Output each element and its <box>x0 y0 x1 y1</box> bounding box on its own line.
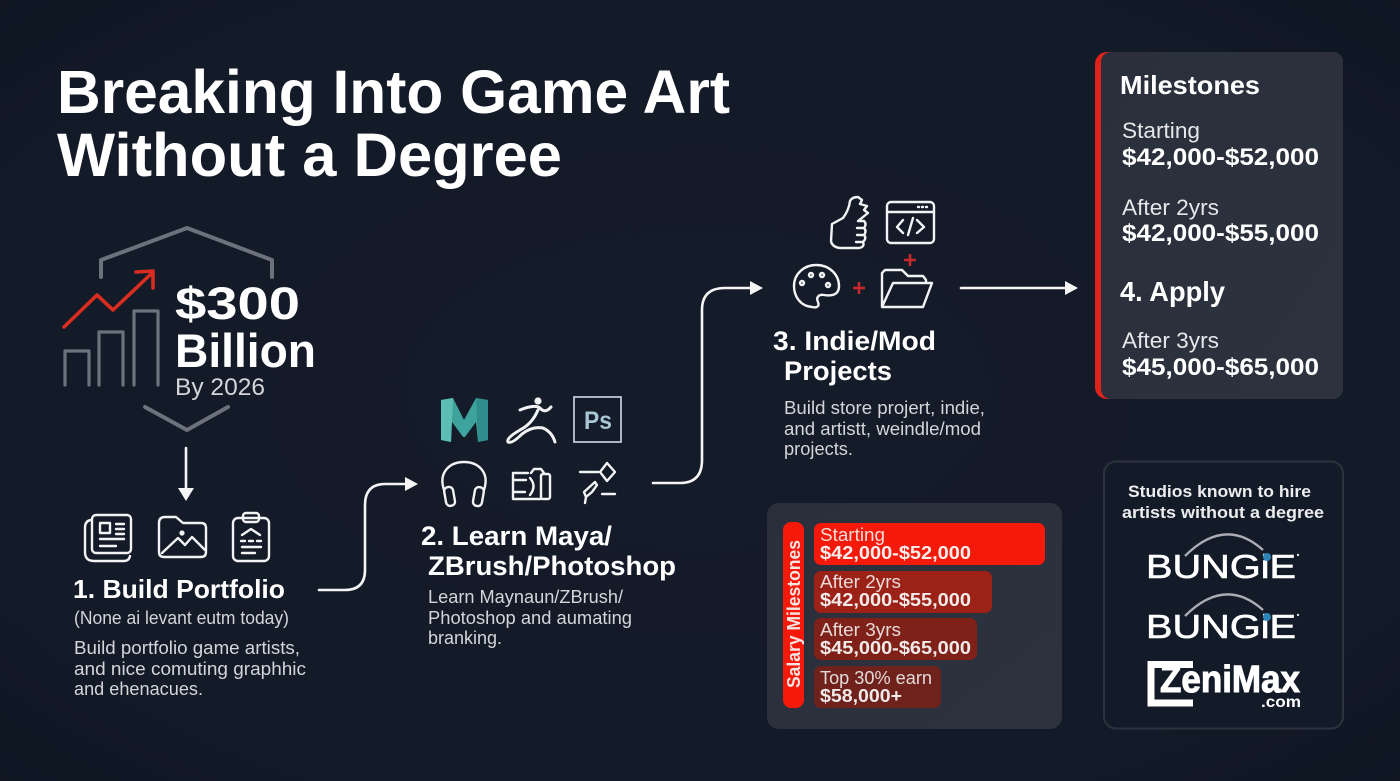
bar: top 30 percent: Top 30% earn <box>820 668 932 688</box>
milestone: after 2 years: $42,000-$55,000 <box>1122 220 1319 247</box>
panel background <box>767 503 1062 729</box>
logo: Bungie second: BUNGiE <box>1146 608 1296 645</box>
panel: studios <box>1104 462 1343 728</box>
bar: after 3 years: After 3yrs <box>820 620 901 640</box>
logo: Bungie <box>1146 534 1299 585</box>
milestone: after 2 years <box>1122 195 1319 247</box>
milestone: after 3 years <box>1122 328 1319 381</box>
icon: open folder <box>882 270 932 307</box>
logo: Bungie: BUNGiE <box>1146 548 1296 585</box>
logo: Bungie second <box>1146 594 1299 645</box>
bar: after 2 years: After 2yrs <box>820 572 901 592</box>
icon: growth bars <box>65 311 158 385</box>
arrow: step 1 to step 2 <box>319 477 418 590</box>
panel heading <box>1122 482 1324 522</box>
icon: red trend arrow <box>64 271 153 327</box>
icon: ZBrush runner <box>508 397 555 442</box>
bar: after 2 years: $42,000-$55,000 <box>820 590 971 610</box>
bar: after 3 years: $45,000-$65,000 <box>820 638 971 658</box>
bar: top 30 percent <box>814 666 941 708</box>
bar: top 30 percent: $58,000+ <box>820 686 902 706</box>
description: branking. <box>428 628 502 648</box>
milestone: starting <box>1122 118 1319 171</box>
description: Build store projert, indie, <box>784 398 985 418</box>
description: Photoshop and aumating <box>428 608 632 628</box>
heading: apply: 4. Apply <box>1120 276 1225 307</box>
bar: after 2 years <box>814 571 992 613</box>
logo: ZeniMax: .com <box>1261 694 1301 711</box>
market size stat <box>64 228 316 430</box>
description <box>428 587 632 648</box>
stat date: By 2026 <box>175 374 265 401</box>
icon: image folder <box>159 517 206 557</box>
arrow: stat to step 1 <box>178 448 194 501</box>
arrow: step 3 to step 4 <box>961 281 1078 295</box>
icon: clipboard <box>233 513 269 561</box>
panel border <box>1104 462 1343 728</box>
description: and nice comuting graphhic <box>74 659 306 679</box>
icon: red plus middle <box>853 282 865 294</box>
step 2: learn tools <box>421 397 676 648</box>
step 1: build portfolio <box>73 513 306 699</box>
vertical label: Salary Milestones <box>784 540 804 688</box>
subheading: (None ai levant eutm today) <box>74 608 289 628</box>
milestone: starting: Starting <box>1122 118 1200 143</box>
bar: starting <box>814 523 1045 565</box>
description: Learn Maynaun/ZBrush/ <box>428 587 623 607</box>
panel: salary milestones chart <box>767 503 1062 729</box>
step 2: learn tools: ZBrush/Photoshop <box>428 551 676 581</box>
description: Build portfolio game artists, <box>74 638 300 658</box>
heading: 1. Build Portfolio <box>73 574 285 604</box>
description: and artistt, weindle/mod <box>784 419 981 439</box>
icon: palette <box>794 265 839 307</box>
description <box>784 398 985 459</box>
icon: headphones <box>442 462 486 507</box>
description: and ehenacues. <box>74 679 203 699</box>
logo: ZeniMax: ZeniMax <box>1160 659 1300 701</box>
stat value: $300 <box>175 278 300 329</box>
icon: code window <box>887 202 934 243</box>
arrow: step 2 to step 3 <box>653 281 763 483</box>
icon: red plus top <box>904 254 916 266</box>
milestone: after 3 years: $45,000-$65,000 <box>1122 354 1319 381</box>
icon: thumbs up <box>831 197 868 248</box>
icon: hexagon frame <box>101 228 272 430</box>
icon: Photoshop logo: Ps <box>584 407 612 435</box>
heading: 2. Learn Maya/ <box>421 521 613 551</box>
step 3: indie and mod projects <box>773 197 985 459</box>
icon: camera <box>513 469 550 499</box>
milestone: after 3 years: After 3yrs <box>1122 328 1219 353</box>
panel: milestones and apply <box>1095 52 1343 399</box>
icon: Maya logo <box>441 398 488 442</box>
title: Without a Degree <box>57 121 562 189</box>
title <box>57 58 730 189</box>
panel accent stripe <box>1095 52 1135 399</box>
heading: 3. Indie/Mod <box>773 326 936 356</box>
milestone: starting: $42,000-$52,000 <box>1122 144 1319 171</box>
description: projects. <box>784 439 853 459</box>
panel heading: artists without a degree <box>1122 503 1324 522</box>
bar: after 3 years <box>814 618 977 660</box>
step 3: indie and mod projects: Projects <box>784 356 892 386</box>
title: Breaking Into Game Art <box>57 58 730 126</box>
icon: Photoshop logo <box>574 397 621 442</box>
description <box>74 638 306 699</box>
bar: starting: $42,000-$52,000 <box>820 543 971 563</box>
milestone: after 2 years: After 2yrs <box>1122 195 1219 220</box>
panel background <box>1101 52 1343 399</box>
heading: milestones: Milestones <box>1120 70 1260 100</box>
icon: newspaper <box>85 515 131 561</box>
panel heading: Studios known to hire <box>1128 482 1311 501</box>
bar: starting: Starting <box>820 525 885 545</box>
stat unit: Billion <box>175 324 316 377</box>
icon: pen and sparkle <box>580 463 615 503</box>
